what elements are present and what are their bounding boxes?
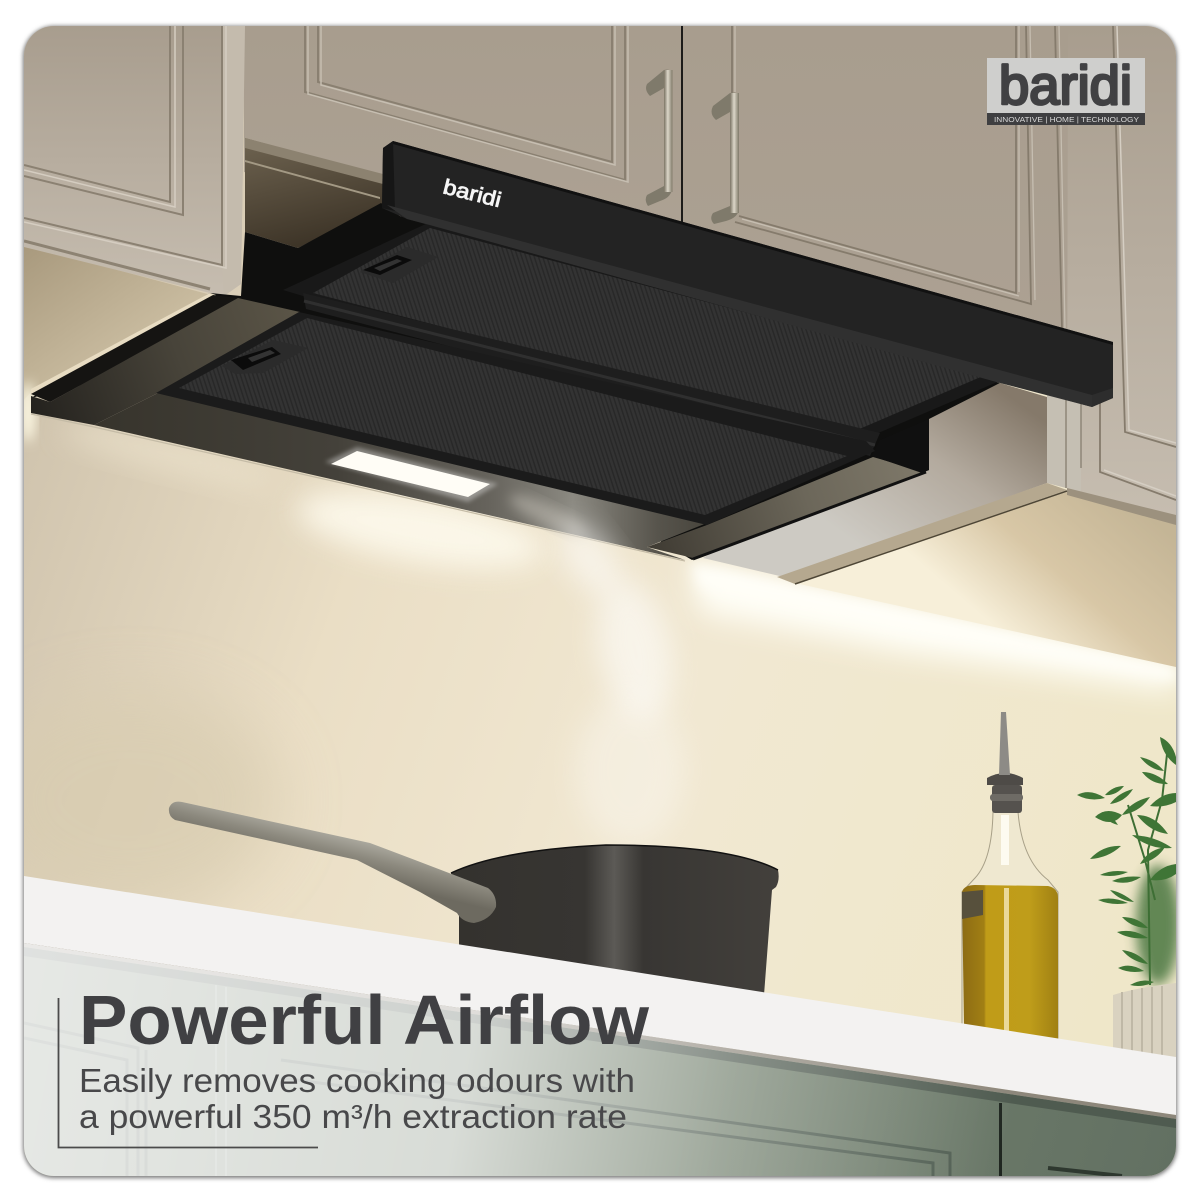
icon: left door handle (646, 70, 672, 206)
hood black trim (31, 295, 216, 402)
hood lower edge highlight (31, 414, 685, 561)
herb plant (1077, 737, 1180, 986)
countertop (24, 876, 1176, 1119)
side glint (31, 293, 216, 395)
hood body (31, 141, 1113, 561)
icon: right door handle (711, 93, 739, 224)
caption frame line (58, 998, 318, 1148)
hood right black line (693, 472, 926, 559)
back filter frame (283, 222, 1002, 440)
upper cabinet: centre left (244, 26, 683, 222)
soffit under cabinet (703, 383, 1047, 577)
title: Powerful Airflow (79, 981, 650, 1059)
brand logo: baridi (999, 54, 1132, 116)
divider bar (303, 293, 880, 456)
upper cabinet: far right (1047, 26, 1176, 525)
hood logo: baridi (441, 176, 504, 212)
front filter tab (222, 340, 308, 374)
front fascia bar (382, 141, 1113, 407)
back filter tab (360, 247, 438, 283)
text fade overlay (24, 943, 1176, 1176)
upper cabinet: left (24, 26, 245, 296)
hood side frame (31, 298, 300, 425)
oil bottle (962, 712, 1058, 1040)
pan handle (169, 802, 496, 923)
hood dark backing (31, 203, 1000, 560)
front filter mesh (179, 318, 847, 515)
saucepan (169, 802, 779, 995)
under-cabinet recess (245, 138, 383, 248)
back filter mesh (313, 228, 983, 433)
hood right black body (881, 459, 929, 472)
brand logo: INNOVATIVE | HOME | TECHNOLOGY (994, 115, 1139, 124)
LED light panel (325, 447, 498, 502)
green base cabinets (24, 943, 1176, 1176)
description: a powerful 350 m³/h extraction rate (79, 1098, 627, 1135)
cabinet underside edge (777, 483, 1067, 584)
hood front plate (94, 393, 707, 560)
description: Easily removes cooking odours with (79, 1062, 635, 1099)
plant pot (1113, 983, 1176, 1065)
front filter frame (156, 312, 875, 525)
description (79, 1062, 635, 1135)
steam (506, 488, 685, 845)
hood right chrome (647, 457, 925, 558)
upper cabinet: centre right (683, 26, 1068, 330)
